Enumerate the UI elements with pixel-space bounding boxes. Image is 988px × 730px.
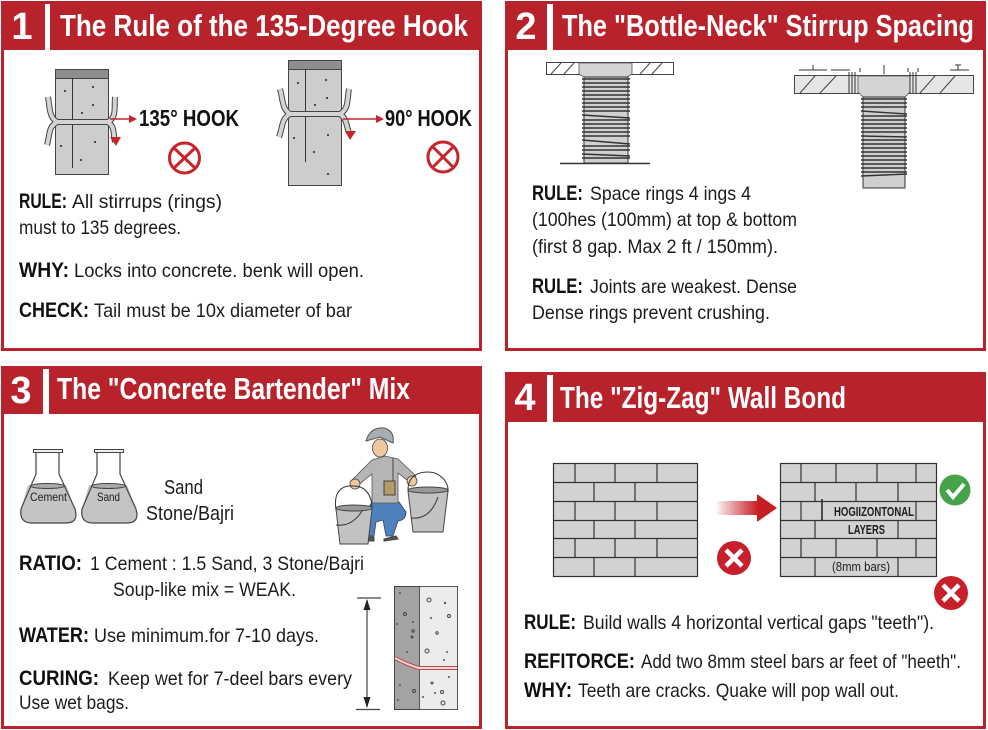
text block: mix rules: CURING: — [19, 667, 99, 690]
text block: spacing rules: RULE: — [532, 182, 583, 205]
heading 3 — [49, 366, 482, 414]
icon: red cross circle left — [717, 541, 751, 575]
diagram: brick wall with horizontal layers — [780, 463, 936, 576]
heading 1 — [50, 1, 482, 50]
text block: mix rules: RATIO: — [19, 552, 82, 575]
text block: spacing rules: (first 8 gap. Max 2 ft / 150mm). — [532, 236, 778, 258]
diagram: brick wall with straight joints — [553, 463, 698, 576]
number badge 3 — [1, 366, 43, 414]
number badge 4 — [505, 372, 547, 422]
icon: green check — [940, 474, 970, 506]
heading 2 — [553, 1, 986, 50]
diagram: stirrup column with slab — [546, 62, 674, 164]
text block: spacing rules: RULE: — [532, 275, 583, 298]
icon: red cross circle right — [934, 576, 968, 610]
icon: worker carrying buckets — [335, 428, 448, 544]
text block: mix rules: Keep wet for 7-deel bars every — [108, 668, 352, 690]
label: sand and stone: Stone/Bajri — [146, 503, 234, 525]
diagram: 90 degree hook column — [279, 60, 384, 186]
icon: cement flask: Cement — [30, 490, 68, 504]
number badge 2: 2 — [515, 6, 537, 48]
text block: mix rules: 1 Cement : 1.5 Sand, 3 Stone/Bajri — [90, 553, 364, 575]
heading 4: The "Zig-Zag" Wall Bond — [560, 380, 846, 415]
text block: hook rules — [19, 190, 364, 322]
text block: hook rules: Locks into concrete. benk will open. — [74, 260, 364, 282]
text block: mix rules — [19, 552, 364, 714]
diagram: height dimension arrow — [356, 598, 381, 710]
diagram: brick wall with horizontal layers: (8mm bars) — [832, 559, 890, 574]
diagram: brick wall with horizontal layers: LAYERS — [848, 522, 885, 537]
text block: wall rules — [524, 611, 961, 702]
panel 2: bottle-neck stirrup spacing — [505, 1, 986, 350]
text block: spacing rules: Joints are weakest. Dense — [590, 276, 797, 298]
text block: hook rules: RULE: — [19, 190, 67, 213]
text block: mix rules: Use minimum.for 7-10 days. — [94, 625, 319, 647]
icon: cement flask — [21, 450, 76, 523]
label: 135 degree hook: 135° HOOK — [139, 105, 239, 131]
icon: sand flask — [82, 450, 137, 523]
heading 4 — [553, 372, 986, 422]
text block: hook rules: All stirrups (rings) — [72, 191, 222, 213]
text block: spacing rules: Space rings 4 ings 4 — [590, 183, 751, 205]
diagram: brick wall with horizontal layers: HOGIIZONTONAL — [834, 504, 914, 519]
text block: wall rules: Teeth are cracks. Quake will pop wall out. — [578, 680, 899, 702]
icon: red cross 1 — [170, 143, 200, 173]
text block: spacing rules: Dense rings prevent crushing. — [532, 302, 770, 324]
text block: mix rules: WATER: — [19, 624, 89, 647]
text block: hook rules: WHY: — [19, 259, 69, 282]
heading 1: The Rule of the 135-Degree Hook — [60, 8, 469, 43]
text block: spacing rules: (100hes (100mm) at top & bottom — [532, 209, 797, 231]
arrow: red transition arrow — [717, 494, 777, 522]
text block: wall rules: REFITORCE: — [524, 650, 635, 673]
number badge 4: 4 — [514, 377, 536, 419]
text block: wall rules: WHY: — [524, 679, 572, 702]
panel 3: concrete bartender mix — [1, 366, 482, 728]
text block: wall rules: RULE: — [524, 611, 576, 634]
number badge 2 — [505, 1, 547, 50]
label: sand and stone — [146, 477, 234, 525]
text block: hook rules: Tail must be 10x diameter of bar — [94, 300, 352, 322]
text block: wall rules: Build walls 4 horizontal vertical gaps "teeth"). — [583, 612, 934, 634]
text block: mix rules: Use wet bags. — [19, 692, 129, 714]
text block: spacing rules — [532, 182, 797, 324]
diagram: concrete cross-section — [394, 586, 458, 710]
number badge 1 — [1, 1, 45, 50]
panel 4: zig-zag wall bond — [505, 372, 986, 728]
heading 3: The "Concrete Bartender" Mix — [57, 371, 411, 406]
text block: mix rules: Soup-like mix = WEAK. — [113, 579, 296, 601]
panel 1: the 135-degree hook — [1, 1, 482, 350]
icon: sand flask: Sand — [97, 490, 120, 504]
label: 90 degree hook: 90° HOOK — [385, 105, 472, 131]
icon: red cross 2 — [428, 142, 458, 172]
number badge 1: 1 — [11, 6, 33, 48]
text block: hook rules: CHECK: — [19, 299, 89, 322]
label: sand and stone: Sand — [164, 477, 203, 499]
number badge 3: 3 — [10, 370, 32, 412]
diagram: stirrup column with dimensions — [794, 65, 974, 188]
text block: hook rules: must to 135 degrees. — [19, 217, 181, 239]
diagram: 135 degree hook column — [47, 70, 137, 174]
